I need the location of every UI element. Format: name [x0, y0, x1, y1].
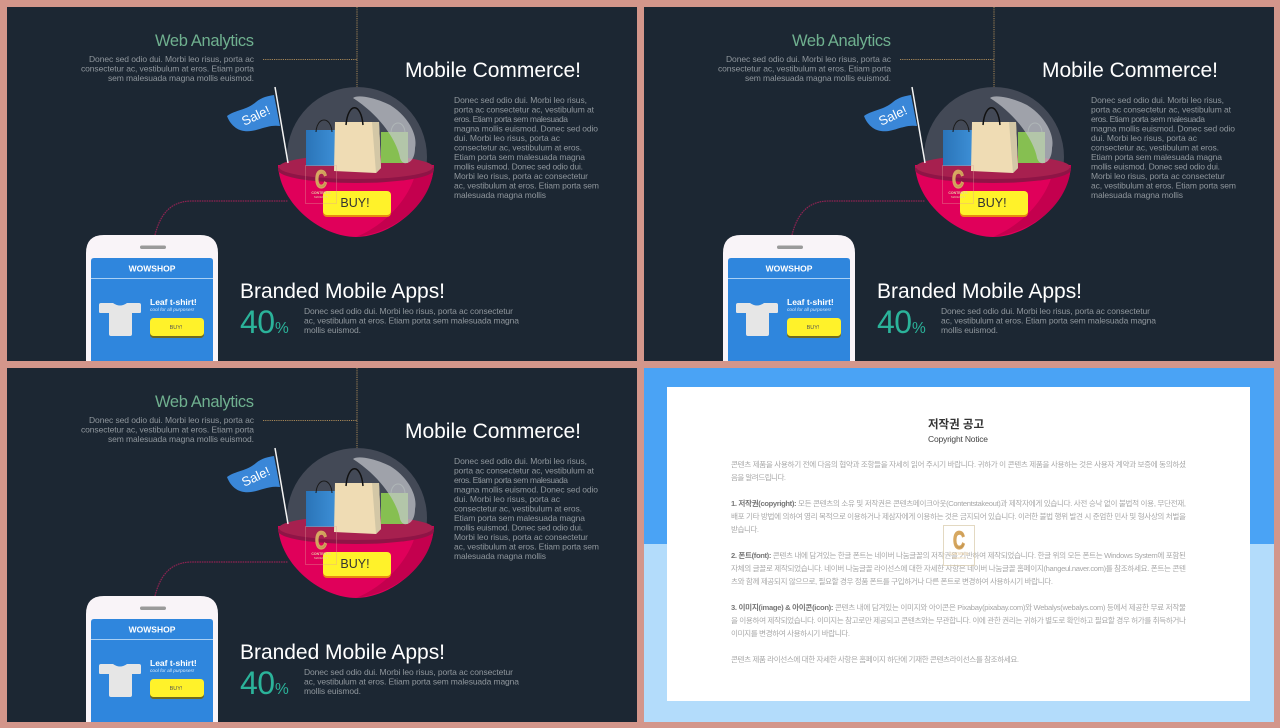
text block: mobile commerce body: porta ac consectetur ac, vestibulum at [454, 466, 595, 476]
text block: intro: 음을 알려드립니다. [731, 472, 786, 482]
icon: t-shirt [99, 303, 141, 336]
text block: mobile commerce body: ac, vestibulum at eros. Etiam porta sem [1091, 180, 1236, 190]
icon: shopping globe [915, 87, 1071, 237]
text block: mobile commerce body: dui. Morbi leo risus, porta ac [1091, 133, 1198, 143]
phone mockup [86, 596, 218, 722]
button: phone buy: BUY! [170, 325, 183, 331]
watermark logo: MAKEOUT [951, 195, 965, 199]
icon: sale flag [227, 87, 288, 163]
watermark logo: CONTENTS [948, 191, 968, 195]
text block: mobile commerce body: magna mollis euismod. Donec sed odio [1091, 124, 1235, 134]
text block: branded apps body [304, 667, 519, 696]
text block: mobile commerce body: dui. Morbi leo risus, porta ac [454, 494, 561, 504]
text block: branded apps body: ac, vestibulum at eros. Etiam porta sem malesuada magna [304, 316, 519, 326]
text block: section 3 image: 이미지를 변경하여 사용하시기 바랍니다. [731, 628, 850, 638]
watermark logo [944, 526, 974, 566]
heading: web analytics: Web Analytics [155, 393, 254, 411]
text block: branded apps body: Donec sed odio dui. Morbi leo risus, porta ac consectetur [941, 306, 1150, 316]
text block: web analytics body [718, 54, 892, 83]
watermark logo [306, 526, 336, 564]
heading: mobile commerce: Mobile Commerce! [1042, 59, 1218, 82]
text block: mobile commerce body: consectetur ac, vestibulum at eros. [1091, 142, 1219, 152]
heading: mobile commerce: Mobile Commerce! [405, 420, 581, 443]
phone header: WOWSHOP [766, 264, 813, 274]
icon: sale flag: Sale! [239, 463, 272, 490]
phone header: WOWSHOP [129, 264, 176, 274]
watermark logo [942, 166, 974, 204]
subheading: copyright notice: Copyright Notice [928, 434, 988, 444]
text block: mobile commerce body: Donec sed odio dui. Morbi leo risus, [454, 456, 587, 466]
text block: section 3 image: 을 이용하여 제작되었습니다. 이미지는 참고로만 제공되고 콘텐츠와는 무관합니다. 이에 관한 권리는 귀하가 별도로 확인하고 필요할 경우 허가를 취득하거나 [731, 615, 1186, 625]
text block: mobile commerce body: Morbi leo risus, porta ac consectetur [454, 532, 588, 542]
button: buy [960, 191, 1028, 217]
text block: section 2 font: 2. 폰트(font): 콘텐츠 내에 담겨있는 한글 폰트는 네이버 나눔글꼴의 저작권을 기반하여 제작되었습니다. 한글 위의 모든 폰트는 Windows System에 포함된 [731, 550, 1186, 560]
text block: mobile commerce body: magna mollis euismod. Donec sed odio [454, 484, 598, 494]
text block: mobile commerce body: porta ac consectetur ac, vestibulum at [454, 104, 595, 114]
button: buy [323, 191, 391, 217]
stat: 40 percent: % [275, 320, 289, 337]
watermark logo: CONTENTS [311, 552, 331, 556]
text block: section 1 copyright: 1. 저작권(copyright): 모든 콘텐츠의 소유 및 저작권은 콘텐츠메이크아웃(Contentstakeout)과 제작자에게 있습니다. 사전 승낙 없이 불법적 이용, 무단전재, [731, 498, 1186, 508]
phone header: WOWSHOP [129, 624, 176, 634]
text block: mobile commerce body: ac, vestibulum at eros. Etiam porta sem [454, 542, 599, 552]
text block: section 2 font [731, 550, 1186, 586]
text block: mobile commerce body: consectetur ac, vestibulum at eros. [454, 504, 582, 514]
heading: branded mobile apps: Branded Mobile Apps! [240, 641, 445, 664]
text block: mobile commerce body: mollis euismod. Donec sed odio dui. [454, 522, 583, 532]
product title: Leaf t-shirt! [150, 297, 197, 307]
button: buy: BUY! [340, 557, 370, 571]
text block: branded apps body: Donec sed odio dui. Morbi leo risus, porta ac consectetur [304, 667, 513, 677]
text block: mobile commerce body: Donec sed odio dui. Morbi leo risus, [1091, 95, 1224, 105]
heading: web analytics: Web Analytics [792, 32, 891, 50]
panel: slide 2 [644, 7, 1274, 361]
text block: mobile commerce body: Etiam porta sem malesuada magna [454, 152, 585, 162]
text block: mobile commerce body: consectetur ac, vestibulum at eros. [454, 142, 582, 152]
stat: 40 percent: % [275, 681, 289, 698]
text block: branded apps body: ac, vestibulum at eros. Etiam porta sem malesuada magna [304, 676, 519, 686]
icon: shopping globe [278, 448, 434, 598]
text block: web analytics body: consectetur ac, vestibulum at eros. Etiam porta [718, 64, 891, 74]
text block: section 3 image [731, 602, 1186, 638]
watermark logo: C [315, 166, 327, 194]
text block: mobile commerce body: Etiam porta sem malesuada magna [454, 513, 585, 523]
product title: Leaf t-shirt! [787, 297, 834, 307]
icon: t-shirt [736, 303, 778, 336]
text block: branded apps body: mollis euismod. [304, 686, 361, 696]
button: phone buy: BUY! [170, 686, 183, 692]
text block: mobile commerce body: dui. Morbi leo risus, porta ac [454, 133, 561, 143]
watermark logo: CONTENTS [949, 552, 969, 556]
product caption: cool for all purposes! [787, 307, 832, 313]
icon: t-shirt [99, 664, 141, 697]
text block: mobile commerce body: magna mollis euismod. Donec sed odio [454, 124, 598, 134]
text block: section 2 font: 츠와 함께 제공되지 않으므로, 필요할 경우 정품 폰트를 구입하거나 다른 폰트로 변경하여 사용하시기 바랍니다. [731, 576, 1053, 586]
text block: mobile commerce body: porta ac consectetur ac, vestibulum at [1091, 104, 1232, 114]
heading: mobile commerce: Mobile Commerce! [405, 59, 581, 82]
stat: 40 percent: % [912, 320, 926, 337]
icon: sale flag: Sale! [239, 102, 272, 129]
text block: mobile commerce body: eros. Etiam porta sem malesuada [454, 475, 568, 485]
panel: slide 3 [7, 368, 637, 722]
phone mockup [86, 235, 218, 361]
text block: mobile commerce body: Donec sed odio dui. Morbi leo risus, [454, 95, 587, 105]
icon: sale flag [227, 448, 288, 524]
panel: copyright notice [644, 368, 1274, 722]
watermark logo: MAKEOUT [952, 556, 966, 560]
text block: branded apps body [304, 306, 519, 335]
text block: web analytics body: consectetur ac, vestibulum at eros. Etiam porta [81, 64, 254, 74]
heading: web analytics: Web Analytics [155, 32, 254, 50]
text block: web analytics body: Donec sed odio dui. Morbi leo risus, porta ac [726, 54, 892, 64]
stat: 40 percent: 40 [877, 304, 912, 340]
icon: shopping globe [278, 87, 434, 237]
text block: mobile commerce body: ac, vestibulum at eros. Etiam porta sem [454, 180, 599, 190]
text block: mobile commerce body: eros. Etiam porta sem malesuada [1091, 114, 1205, 124]
watermark logo [306, 166, 336, 204]
button: buy: BUY! [977, 196, 1007, 210]
panel: slide 1 [7, 7, 637, 361]
text block: web analytics body: consectetur ac, vestibulum at eros. Etiam porta [81, 424, 254, 434]
text block: mobile commerce body [1091, 95, 1236, 200]
text block: mobile commerce body: mollis euismod. Donec sed odio dui. [1091, 162, 1220, 172]
text block: branded apps body [941, 306, 1156, 335]
text block: intro [731, 459, 1186, 482]
text block: mobile commerce body [454, 456, 599, 561]
icon: sale flag [864, 87, 925, 163]
text block: section 1 copyright [731, 498, 1186, 534]
button: buy: BUY! [340, 196, 370, 210]
watermark logo: MAKEOUT [314, 556, 328, 560]
text block: mobile commerce body: Morbi leo risus, porta ac consectetur [1091, 171, 1225, 181]
text block: section 1 copyright: 배포 기타 방법에 의하여 영리 목적으로 이용하거나 제삼자에게 이용하는 것은 금지되어 있습니다. 이러한 불법 행위 발견 시 준엄한 민사 및 형사상의 처벌을 [731, 511, 1186, 521]
text block: web analytics body: sem malesuada magna mollis euismod. [108, 73, 254, 83]
text block: mobile commerce body: eros. Etiam porta sem malesuada [454, 114, 568, 124]
text block: web analytics body [81, 415, 255, 444]
text block: web analytics body: Donec sed odio dui. Morbi leo risus, porta ac [89, 54, 255, 64]
text block: branded apps body: ac, vestibulum at eros. Etiam porta sem malesuada magna [941, 316, 1156, 326]
text block: closing: 콘텐츠 제품 라이선스에 대한 자세한 사항은 홈페이지 하단에 기재한 콘텐츠라이선스를 참조하세요. [731, 654, 1019, 664]
heading: copyright title: 저작권 공고 [928, 417, 984, 431]
phone mockup [723, 235, 855, 361]
heading: branded mobile apps: Branded Mobile Apps! [240, 280, 445, 303]
button: buy [323, 552, 391, 578]
button: phone buy: BUY! [807, 325, 820, 331]
product caption: cool for all purposes! [150, 307, 195, 313]
text block: web analytics body: sem malesuada magna mollis euismod. [108, 434, 254, 444]
stat: 40 percent: 40 [240, 665, 275, 701]
watermark logo: C [953, 527, 965, 555]
text block: branded apps body: mollis euismod. [304, 325, 361, 335]
text block: mobile commerce body: Etiam porta sem malesuada magna [1091, 152, 1222, 162]
watermark logo: C [315, 527, 327, 555]
text block: branded apps body: Donec sed odio dui. Morbi leo risus, porta ac consectetur [304, 306, 513, 316]
text block: mobile commerce body: malesuada magna mollis [454, 551, 546, 561]
text block: section 3 image: 3. 이미지(image) & 아이콘(icon): 콘텐츠 내에 담겨있는 이미지와 아이콘은 Pixabay(pixabay.com)와 Webalys(webalys.com) 등에서 제공한 무료 저작물 [731, 602, 1186, 612]
heading: branded mobile apps: Branded Mobile Apps! [877, 280, 1082, 303]
watermark logo: MAKEOUT [314, 195, 328, 199]
text block: mobile commerce body: malesuada magna mollis [454, 190, 546, 200]
text block: section 2 font: 자체의 글꼴로 제작되었습니다. 네이버 나눔글꼴 라이선스에 대한 자세한 사항은 네이버 나눔글꼴 홈페이지(hangeul.naver.com)를 참조하세요. 폰트는 콘텐 [731, 563, 1186, 573]
text block: web analytics body [81, 54, 255, 83]
text block: web analytics body: Donec sed odio dui. Morbi leo risus, porta ac [89, 415, 255, 425]
stat: 40 percent: 40 [240, 304, 275, 340]
watermark logo: CONTENTS [311, 191, 331, 195]
icon: sale flag: Sale! [876, 102, 909, 129]
text block: mobile commerce body: malesuada magna mollis [1091, 190, 1183, 200]
text block: mobile commerce body: Morbi leo risus, porta ac consectetur [454, 171, 588, 181]
text block: mobile commerce body: mollis euismod. Donec sed odio dui. [454, 162, 583, 172]
product caption: cool for all purposes! [150, 668, 195, 674]
text block: section 1 copyright: 받습니다. [731, 524, 759, 534]
text block: web analytics body: sem malesuada magna mollis euismod. [745, 73, 891, 83]
text block: intro: 콘텐츠 제품을 사용하기 전에 다음의 협약과 조항들을 자세히 읽어 주시기 바랍니다. 귀하가 이 콘텐츠 제품을 사용하는 것은 사용자 계약과 보증에 동의하셨 [731, 459, 1186, 469]
product title: Leaf t-shirt! [150, 658, 197, 668]
text block: mobile commerce body [454, 95, 599, 200]
watermark logo: C [952, 166, 964, 194]
text block: branded apps body: mollis euismod. [941, 325, 998, 335]
